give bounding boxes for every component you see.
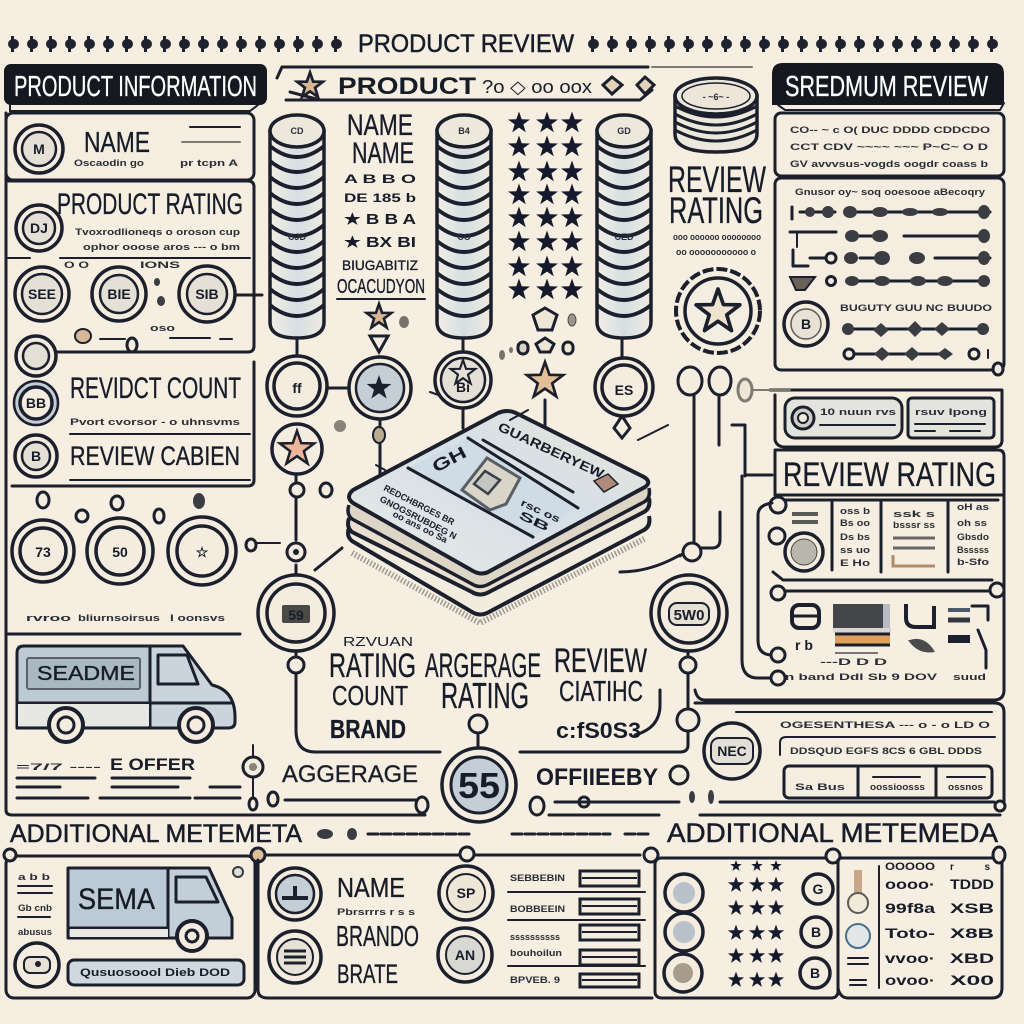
review rating heading: ooo oooooo oooooooo bbox=[673, 232, 761, 242]
central labels: ARGERAGE bbox=[425, 647, 541, 685]
three-cell box: oossioosss bbox=[870, 782, 925, 792]
rating badges bbox=[15, 266, 262, 352]
label: offerby: OFFIIEEBY bbox=[536, 764, 658, 791]
table: E Ho bbox=[840, 558, 871, 568]
central labels: c:fS0S3 bbox=[556, 718, 641, 743]
name column: DE 185 b bbox=[344, 191, 416, 205]
product card surface: GH bbox=[429, 443, 470, 477]
pill bbox=[908, 398, 994, 438]
three-cell box: ossnos bbox=[948, 782, 983, 792]
table text: Toto- bbox=[885, 925, 935, 941]
heading: additional metadata left bbox=[10, 820, 650, 848]
pill: rsuv Ipong bbox=[915, 407, 987, 417]
icon: star bbox=[297, 72, 323, 97]
offer box: DDSQUD EGFS 8CS 6 GBL DDDS bbox=[790, 746, 982, 756]
summary text box bbox=[775, 113, 1004, 176]
review count: REVIDCT COUNT bbox=[70, 372, 241, 405]
circle badge bbox=[595, 358, 653, 416]
delivery truck small bbox=[68, 867, 243, 951]
summary text box: CO-- ~ c O( DUC DDDD CDDCDO bbox=[790, 125, 990, 135]
badges: AN bbox=[455, 947, 475, 963]
table: ss uo bbox=[840, 545, 871, 555]
delivery truck bbox=[17, 645, 235, 742]
coin column 1: CD bbox=[290, 126, 304, 136]
table text: 99f8a bbox=[885, 900, 935, 916]
three-cell box bbox=[784, 766, 992, 798]
rating badges: oso bbox=[150, 323, 176, 333]
coin column 3: GD bbox=[617, 126, 631, 136]
data icons: r b bbox=[795, 637, 813, 653]
right badges: B bbox=[810, 965, 820, 981]
connector network bbox=[240, 338, 752, 815]
label: aggerage: AGGERAGE bbox=[282, 761, 418, 788]
table text bbox=[885, 861, 994, 988]
table text: OOOOO bbox=[885, 861, 936, 873]
panel: bottom star ratings bbox=[644, 848, 840, 998]
rating row 3 bbox=[793, 250, 990, 266]
spec rows: bouhoilun bbox=[510, 948, 562, 958]
name column: ★ B B A bbox=[344, 211, 416, 228]
rating rows box bbox=[775, 178, 1004, 370]
product card surface: GUARBERYEW bbox=[496, 419, 607, 482]
small notes bbox=[18, 872, 53, 937]
name column: OCACUDYON bbox=[337, 276, 425, 298]
table text: XSB bbox=[950, 900, 994, 916]
product rating: Tvoxrodlioneqs o oroson cup bbox=[75, 227, 241, 237]
table: Ds bs bbox=[840, 532, 870, 542]
rating row 5 bbox=[842, 321, 989, 337]
rating row 4 bbox=[790, 275, 990, 290]
small notes: abusus bbox=[18, 927, 52, 937]
product card surface: GNOGSRUBDEG N bbox=[378, 494, 458, 541]
coin column 1: CJD bbox=[288, 232, 306, 242]
heading: additional metadata right: ADDITIONAL METEMEDA bbox=[667, 818, 998, 848]
pill bbox=[68, 960, 244, 985]
name column: BIUGABITIZ bbox=[342, 257, 418, 273]
product card surface: SB bbox=[517, 508, 552, 535]
lower badges: ☆ bbox=[196, 544, 209, 560]
table text: TDDD bbox=[950, 876, 994, 892]
seal star badge bbox=[676, 269, 760, 353]
labels: Pbrsrrrs r s s bbox=[337, 907, 415, 917]
banner: product: PRODUCT bbox=[338, 73, 476, 100]
coin column 2 bbox=[437, 115, 491, 338]
table: ssk s bbox=[893, 509, 935, 519]
central labels: BRAND bbox=[330, 714, 406, 744]
rating badges: SEE bbox=[28, 286, 56, 302]
panel: bottom brand bbox=[258, 847, 652, 998]
circle badge: ES bbox=[615, 382, 633, 398]
lower badges bbox=[8, 492, 240, 634]
rating rows box: BUGUTY GUU NC BUUDO bbox=[840, 303, 992, 313]
summary text box: CCT CDV ~~~~ ~~~ P~C~ O D bbox=[790, 142, 989, 152]
central labels: CIATIHC bbox=[559, 676, 643, 708]
labels bbox=[336, 872, 419, 989]
coin column 1 bbox=[270, 115, 324, 338]
central labels: RZVUAN bbox=[343, 634, 413, 649]
badge: B bbox=[801, 316, 811, 332]
name row bbox=[6, 113, 254, 180]
star badge bbox=[272, 424, 322, 474]
review rating panel bbox=[695, 425, 1004, 700]
circle badge bbox=[651, 575, 727, 651]
rating row 1 bbox=[792, 205, 990, 219]
circle badge: 59 bbox=[288, 607, 304, 623]
product rating: ophor ooose aros --- o bm bbox=[83, 242, 240, 252]
circle badge: ff bbox=[292, 380, 302, 396]
badge: NEC bbox=[717, 743, 747, 759]
table text: r s bbox=[950, 862, 990, 873]
data icons: n band Ddl Sb 9 DOV bbox=[785, 672, 937, 682]
star rows bbox=[728, 860, 784, 987]
name column bbox=[337, 109, 425, 352]
circle badge bbox=[442, 748, 516, 822]
review caption: REVIEW CABIEN bbox=[70, 441, 240, 471]
review rating heading: REVIEW bbox=[668, 159, 766, 200]
review count bbox=[14, 336, 250, 434]
small icons under star grid bbox=[499, 308, 576, 360]
labels: BRANDO bbox=[336, 921, 419, 953]
data icons: suud bbox=[953, 672, 986, 682]
review rating heading: RATING bbox=[669, 190, 763, 231]
name row: pr tcpn A bbox=[180, 158, 239, 168]
badge bbox=[704, 723, 760, 779]
pill bbox=[785, 398, 902, 438]
title: PRODUCT REVIEW bbox=[358, 30, 574, 58]
heading: product information bbox=[4, 64, 267, 111]
table text: ovoo· bbox=[885, 972, 935, 988]
coin column 2: CO bbox=[457, 232, 471, 242]
badges bbox=[269, 868, 321, 983]
review caption bbox=[12, 362, 254, 486]
small notes: Gb cnb bbox=[18, 903, 53, 913]
review coins bbox=[675, 78, 757, 152]
name row: NAME bbox=[84, 127, 150, 159]
table: bsssr ss bbox=[893, 520, 935, 530]
lower badges: bliurnsoirsus bbox=[78, 613, 160, 623]
central product stack bbox=[348, 411, 649, 623]
icons bbox=[846, 870, 870, 985]
spec rows: ssssssssss bbox=[510, 932, 560, 942]
panel: bottom table bbox=[838, 847, 1005, 998]
panel: summary review bbox=[772, 63, 1004, 375]
panel: offers: OGESENTHESA --- o - o LD O bbox=[780, 720, 990, 730]
central labels: RATING bbox=[441, 675, 529, 716]
table: oH as bbox=[957, 502, 989, 512]
star grid bbox=[508, 112, 583, 299]
circle badge: 55 bbox=[458, 765, 500, 806]
rating badges: BIE bbox=[107, 286, 131, 302]
name column: A B B O bbox=[344, 172, 416, 186]
icon: star bbox=[367, 304, 391, 328]
product card surface: REDCHBRGES BR bbox=[382, 483, 457, 527]
name row: Oscaodin go bbox=[74, 158, 145, 168]
table bbox=[769, 497, 998, 580]
offer text bbox=[16, 745, 263, 810]
product card surface: rsc os bbox=[519, 498, 562, 526]
circle badge bbox=[435, 352, 491, 408]
offer box bbox=[780, 737, 995, 756]
circle badge bbox=[267, 356, 327, 416]
heading: additional metadata left: ADDITIONAL METEMETA bbox=[10, 820, 302, 848]
right badges: B bbox=[811, 924, 821, 940]
offer text: E OFFER bbox=[110, 755, 195, 774]
panel: offers bbox=[695, 703, 1005, 815]
panel: bottom left shipping bbox=[4, 848, 265, 998]
table text: XBD bbox=[950, 950, 994, 966]
left badges bbox=[664, 874, 703, 992]
three-cell box: Sa Bus bbox=[795, 782, 845, 792]
central labels: REVIEW bbox=[554, 642, 647, 680]
lower badges: 50 bbox=[112, 544, 128, 560]
small notes: a b b bbox=[18, 872, 51, 882]
spec rows: BPVEB. 9 bbox=[510, 975, 560, 985]
name row: M bbox=[33, 141, 45, 157]
circle badge bbox=[349, 357, 411, 419]
summary text box: GV avvvsus-vogds oogdr coass b bbox=[790, 159, 989, 169]
review rating heading bbox=[668, 159, 766, 257]
badges: SP bbox=[457, 885, 475, 901]
delivery truck: SEADME bbox=[37, 663, 135, 685]
spec rows: SEBBEBIN bbox=[510, 873, 565, 883]
table text: X00 bbox=[950, 972, 994, 988]
table: oh ss bbox=[957, 518, 987, 528]
review caption: B bbox=[31, 448, 41, 464]
labels: BRATE bbox=[337, 959, 398, 989]
name column: NAME bbox=[352, 137, 414, 170]
product rating: IONS bbox=[140, 260, 180, 270]
table: oss b bbox=[840, 506, 871, 516]
heading: summary review bbox=[772, 63, 1004, 110]
delivery truck small: SEMA bbox=[78, 883, 155, 916]
data icons: ---D D D bbox=[820, 657, 888, 667]
coin column 3: CED bbox=[614, 232, 634, 242]
circle badge: 5W0 bbox=[674, 607, 704, 624]
coin column 2: B4 bbox=[458, 126, 470, 136]
panel: review pills bbox=[745, 390, 1002, 447]
icon badge bbox=[15, 943, 59, 987]
review rating heading: oo ooooooooooo o bbox=[676, 247, 756, 257]
spec rows: BOBBEEIN bbox=[510, 904, 565, 914]
coin column 3 bbox=[597, 115, 651, 338]
right badges: G bbox=[813, 881, 824, 897]
offer text: =7/7 ---- bbox=[16, 762, 101, 772]
central labels bbox=[329, 634, 647, 744]
central labels: COUNT bbox=[332, 680, 408, 711]
rating rows box: Gnusor oy~ soq ooesooe aBecoqry bbox=[795, 187, 985, 197]
table: Bsssss bbox=[957, 545, 989, 555]
lower badges: rvroo bbox=[26, 613, 72, 623]
lower badges: 73 bbox=[35, 544, 51, 560]
right badges bbox=[800, 874, 833, 988]
circle badge bbox=[258, 575, 334, 651]
central labels: RATING bbox=[329, 647, 416, 685]
rating row 2 bbox=[790, 229, 990, 247]
product card surface: oo ans oo Sa bbox=[391, 509, 450, 546]
spec rows bbox=[508, 871, 645, 987]
banner: product bbox=[277, 67, 752, 100]
heading: product information: PRODUCT INFORMATION bbox=[14, 71, 257, 103]
table: b-Sfo bbox=[957, 557, 990, 567]
pill: Qusuosoool Dieb DOD bbox=[80, 967, 230, 979]
product card surface bbox=[349, 411, 648, 574]
review coins: - ~6~ - bbox=[703, 92, 729, 102]
bead divider bbox=[771, 583, 1004, 600]
rating badges: SIB bbox=[195, 286, 219, 302]
banner: product: ?o ◇ oo oox bbox=[482, 77, 592, 97]
product rating: PRODUCT RATING bbox=[57, 188, 243, 221]
circle badge: Bi bbox=[456, 379, 470, 395]
pill: 10 nuun rvs bbox=[820, 407, 896, 417]
review count: Pvort cvorsor - o uhnsvms bbox=[70, 417, 240, 427]
panel: product information bbox=[4, 64, 267, 815]
lower badges: I oonsvs bbox=[170, 613, 225, 623]
product rating: O O bbox=[64, 260, 89, 270]
table text: oooo· bbox=[885, 876, 935, 892]
labels: NAME bbox=[337, 872, 405, 903]
badges bbox=[438, 866, 493, 982]
table text: vvoo· bbox=[885, 950, 935, 966]
product rating: DJ bbox=[30, 220, 48, 236]
data icons bbox=[785, 604, 988, 682]
table text: X8B bbox=[950, 925, 994, 941]
badge bbox=[784, 302, 828, 346]
rating row 6 bbox=[844, 347, 988, 361]
table: Gbsdo bbox=[957, 532, 990, 542]
table: Bs oo bbox=[840, 518, 871, 528]
name column: ★ BX BI bbox=[344, 234, 416, 251]
name column: NAME bbox=[347, 109, 413, 142]
review count: BB bbox=[26, 395, 46, 411]
product rating bbox=[8, 181, 254, 352]
icon: star bbox=[527, 362, 563, 396]
